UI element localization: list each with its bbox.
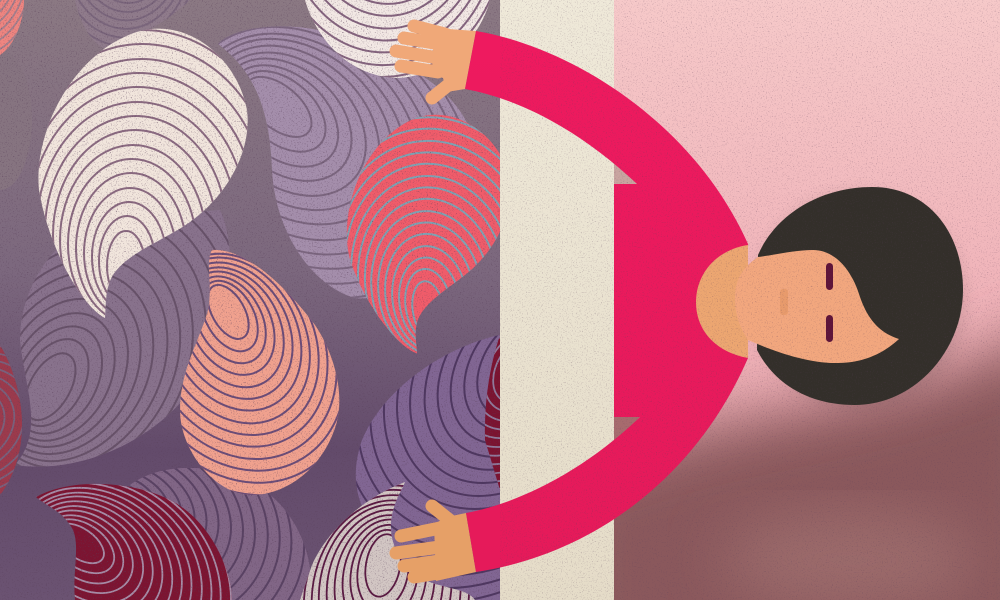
eye: lower: [826, 315, 833, 342]
paisley: lavender left: [16, 210, 230, 466]
hair: [757, 187, 963, 405]
paisley: purple bottom right: [356, 335, 500, 600]
grain: right side speckle: [500, 0, 1000, 600]
hand: top: [396, 26, 476, 98]
panel: pink to brown background: [614, 0, 1000, 600]
paisley: large cream: [38, 28, 248, 318]
paisley: dark red bottom left: [36, 484, 232, 600]
paisley: white top: [305, 0, 490, 78]
paisley: faint top: [76, 0, 188, 48]
paisley: lavender bottom centre: [130, 468, 310, 600]
nose: [780, 289, 788, 315]
sweater: arms and torso: [465, 31, 748, 572]
neck: [696, 245, 748, 358]
paisley: grey white bottom: [300, 482, 475, 600]
panel: patterned wallpaper: [0, 0, 500, 600]
paisley: peach: [180, 250, 340, 495]
paisley: salmon top left: [0, 0, 24, 55]
face: [735, 250, 899, 363]
eye: upper: [826, 263, 833, 290]
panel: cream band: [500, 0, 614, 600]
paisley: faint left edge: [0, 50, 32, 190]
grain: wallpaper speckle: [0, 0, 500, 600]
hand: bottom: [396, 506, 476, 581]
paisley: large lavender upper: [218, 26, 467, 298]
arm gap: bottom triangle: [614, 417, 640, 442]
paisley: dark red left edge: [0, 345, 22, 495]
paisley: coral: [346, 114, 500, 354]
figure: person: [396, 26, 963, 581]
arm gap: top triangle: [614, 160, 638, 184]
paisley: dark red right edge: [484, 335, 500, 490]
